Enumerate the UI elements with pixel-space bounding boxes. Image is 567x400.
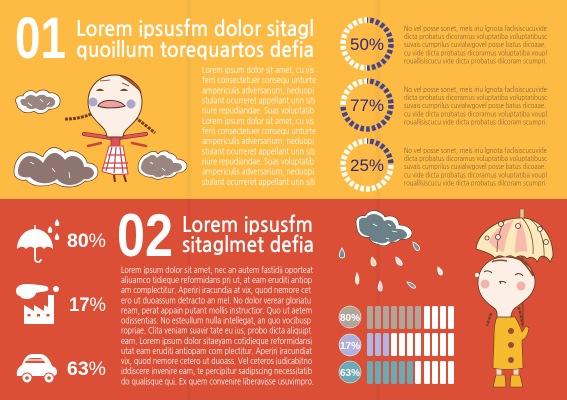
text block: note for 25%: [404, 147, 547, 187]
text block: section 1 body: ampericulis adversarium, neduopi: [202, 168, 314, 177]
text block: section 2 body: [121, 266, 314, 386]
text block: section 1 body: ampericulis adversarium, neduopi: [202, 86, 314, 95]
text block: section 2 body: utat eam eruditi antiopam com plectitur. Aperiri iracundiat: [121, 347, 313, 356]
text block: section 1 body: Lorem ipsum dolor sit amet, cu vis: [202, 66, 314, 75]
chart: 50% ring: [343, 20, 391, 68]
text block: section 2 body: aliuamco tidieque reformidans pri ut, at eam eruditi antiop: [121, 276, 312, 285]
illustration: rain cloud: [356, 211, 412, 246]
illustration: large cloud lower left: [14, 148, 98, 187]
panel: yellow top section: [0, 0, 567, 199]
text block: section 1 body: stulant ocurreret appellant urin siti: [202, 96, 315, 106]
text block: section 1 body: ferri consectetuer consequ unturte: [202, 127, 316, 136]
stat: 17%: 17%: [69, 295, 106, 316]
illustration: small cloud upper: [16, 90, 60, 113]
text block: section 1 body: Lorem ipsum dolor sit amet, cu vis: [202, 117, 314, 126]
text block: section 1 body: ampericulis adversarium, neduopi: [202, 137, 314, 146]
row 80%: 80%: [340, 313, 360, 324]
text block: section 2 body: ream, perat appain putant mollis instructior. Quo ut aetem: [121, 306, 312, 316]
illustration: cloud lower right: [138, 151, 187, 179]
text block: section 1 body: [202, 66, 316, 187]
text block: section 2 body: Lorem ipsum dolor sit amet, nec an autem fastidii oporteat: [121, 266, 314, 275]
icon: factory with smoke: [16, 284, 59, 324]
text block: section 2 body: odissentias. No esteullum nulla intellegat, an quo vocibusp: [121, 317, 311, 326]
heading: section 1 title: [76, 19, 314, 61]
chart: 25% ring: [343, 141, 391, 189]
number 01: 01: [15, 6, 66, 71]
stat: 63%: 63%: [67, 359, 106, 380]
panel: red bottom section: [0, 199, 567, 400]
text block: section 1 body: ferri consectetuer consequ unturte: [202, 76, 316, 85]
text block: section 2 body: do qualisque qui. Ex quem convenire liberavisse usuvimpro.: [121, 377, 314, 386]
chart: 77% ring: [343, 81, 391, 129]
row 63%: 63%: [340, 368, 360, 379]
text block: section 2 body: vix, quod nemore cetero ut duoass. Vel ceteros iudicabitno: [121, 357, 312, 366]
text block: section 1 body: stulant ocurreret appellant urin siti: [202, 178, 315, 187]
illustration: raindrops: [339, 242, 443, 291]
text block: section 2 body: am complectitur. Aperiri iracundia at vix, quod nemore cet: [121, 286, 312, 295]
illustration: girl with umbrella and raincoat: [475, 209, 553, 387]
text block: section 1 body: stulant ocurreret appellant urin siti: [202, 147, 315, 156]
text block: section 2 body: iddiscere invenire eam, te percipitur sadipscing necessitatib: [121, 367, 312, 376]
text block: section 2 body: eam. Lorem ipsum dolor sitaeyam cotidieque reformidansi: [121, 337, 312, 346]
text block: section 2 body: ropriae. Clita veniam suavir tate eu ius, probo dicta aliquipt: [121, 327, 311, 336]
heading: section 2 title: [182, 215, 314, 256]
number 02: 02: [117, 202, 173, 269]
text block: note for 77%: [404, 86, 547, 126]
heading: section 1 title: Lorem ipsusfm dolor sitagl: [76, 19, 314, 40]
icon: car: [17, 354, 57, 383]
text block: section 1 body: riure repudiandae. Suas voluptatib: [202, 157, 314, 166]
row 17%: 17%: [340, 341, 360, 352]
chart: 77% ring: 77%: [350, 96, 384, 115]
stat: 80%: 80%: [67, 231, 106, 252]
heading: section 1 title: quoillum torequartos defia: [76, 40, 314, 61]
icon: umbrella with drops: [17, 219, 59, 262]
chart: 50% ring: 50%: [350, 35, 384, 54]
text block: section 1 body: riure repudiandae. Suas voluptatib: [202, 107, 314, 116]
text block: section 2 body: ero ut duoassum detracto an mel. No dolor verear gloriatu: [121, 296, 311, 305]
illustration: crying girl with arms out: [65, 75, 155, 182]
heading: section 2 title: Lorem ipsusfm: [182, 215, 313, 236]
chart: 25% ring: 25%: [350, 156, 384, 175]
text block: note for 50%: [404, 25, 547, 65]
heading: section 2 title: sitaglmet defia: [182, 235, 314, 256]
chart: percentage bars: [339, 306, 454, 384]
